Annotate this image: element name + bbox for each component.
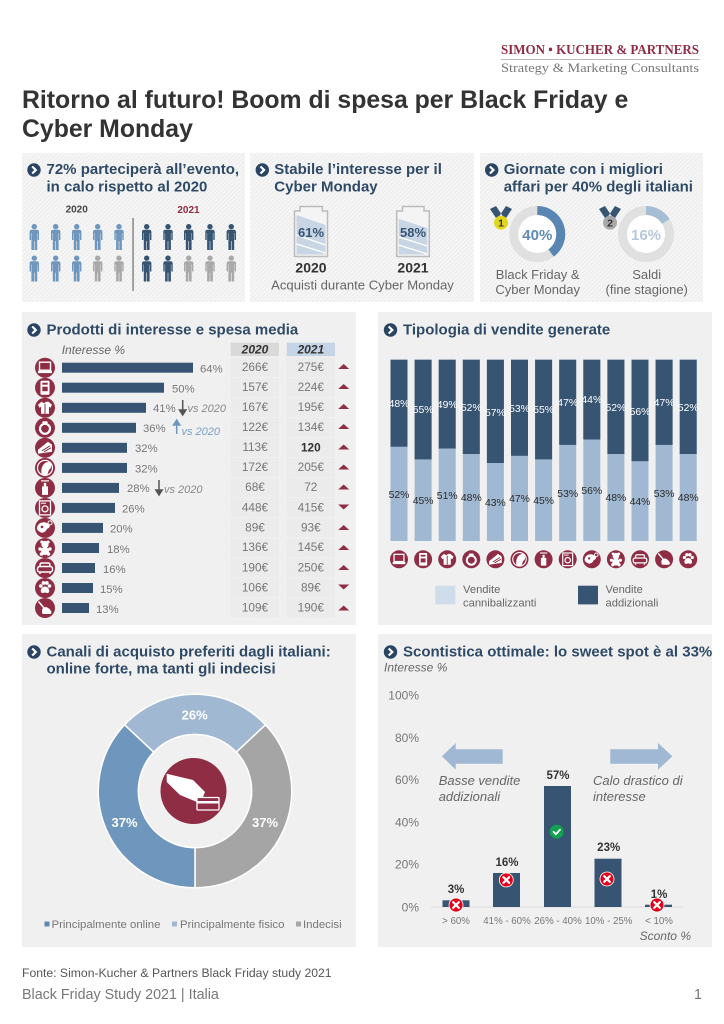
icon: medal 1 bbox=[490, 206, 512, 230]
label: 37% indecisi: 37% bbox=[252, 815, 278, 830]
legend: vendite cannibalizzanti: Vendite bbox=[463, 584, 500, 596]
stacked bar chart: 55% bbox=[533, 405, 554, 416]
annotation: 28% down vs 2020: vs 2020 bbox=[164, 484, 203, 496]
arrow: right bbox=[610, 743, 672, 770]
stacked bar chart: 43% bbox=[485, 498, 506, 509]
x axis labels: 10% - 25% bbox=[585, 916, 633, 927]
stacked bar chart: 44% bbox=[630, 497, 650, 508]
bar values bbox=[448, 770, 667, 901]
column header 2021: 2021 bbox=[296, 342, 324, 356]
bar values: 32% bbox=[135, 443, 158, 455]
bar values: 36% bbox=[143, 423, 166, 435]
donut: 16% bbox=[622, 210, 670, 258]
title: Ritorno al futuro! Boom di spesa per Black Friday e bbox=[22, 87, 628, 114]
stacked bar chart: 52% bbox=[678, 403, 699, 414]
spesa media 2021: 72 bbox=[304, 480, 317, 494]
legend: vendite cannibalizzanti bbox=[435, 584, 536, 610]
bar values: 13% bbox=[96, 604, 119, 616]
stacked bar chart: 57% bbox=[485, 408, 506, 419]
icon: battery 2021: 58% bbox=[400, 225, 426, 240]
bar chart: interesse bbox=[62, 363, 193, 613]
footer: Black Friday Study 2021 | Italia bbox=[22, 987, 219, 1003]
legend: vendite cannibalizzanti: cannibalizzanti bbox=[463, 598, 536, 610]
bar values: 50% bbox=[172, 384, 195, 396]
bar values: 16% bbox=[495, 857, 519, 869]
spesa media 2021: 205€ bbox=[298, 460, 324, 474]
heading: prodotti: Prodotti di interesse e spesa media bbox=[46, 322, 299, 338]
y axis labels: 20% bbox=[395, 858, 419, 872]
label: 2020: 2020 bbox=[66, 204, 88, 216]
icons: rejected ranges bbox=[449, 872, 664, 912]
label: 2021: 2021 bbox=[397, 260, 429, 276]
note: calo drastico bbox=[593, 773, 684, 804]
spesa media 2021: 224€ bbox=[298, 380, 324, 394]
donut: 40%: 40% bbox=[522, 227, 552, 244]
title: Cyber Monday bbox=[22, 116, 193, 143]
column header 2020: 2020 bbox=[241, 342, 269, 356]
icon: medal 1: 1 bbox=[498, 218, 504, 230]
spesa media 2021: 134€ bbox=[298, 420, 324, 434]
stacked bar chart: 48% bbox=[678, 493, 699, 504]
spesa media 2021: 89€ bbox=[301, 580, 321, 594]
donut: 40% bbox=[514, 210, 561, 258]
note: basse vendite bbox=[439, 773, 520, 804]
y axis labels: 60% bbox=[395, 773, 419, 787]
bar values: 20% bbox=[110, 524, 133, 536]
heading: 72% parteciperà: 72% parteciperà all’evento, bbox=[46, 161, 239, 178]
stacked bar chart: 53% bbox=[557, 489, 578, 500]
icon: medal 2: 2 bbox=[607, 218, 613, 230]
spesa media 2020: 190€ bbox=[242, 560, 269, 574]
donut: 16%: 16% bbox=[631, 227, 661, 244]
bar values: 64% bbox=[200, 364, 223, 376]
icon: battery 2020 bbox=[294, 206, 328, 256]
annotation: 36% up vs 2020 bbox=[174, 420, 221, 438]
bar values: 28% bbox=[127, 483, 150, 495]
logo: Simon-Kucher & Partners: Strategy & Marketing Consultants bbox=[501, 61, 699, 75]
heading: tipologia: Tipologia di vendite generate bbox=[403, 322, 610, 338]
stacked bar chart: 48% bbox=[461, 493, 482, 504]
people chart 2020 bbox=[30, 224, 124, 282]
annotation: 36% up vs 2020: vs 2020 bbox=[182, 426, 221, 438]
label: Interesse %: Interesse % bbox=[62, 343, 125, 357]
spesa media 2021: 93€ bbox=[301, 520, 321, 534]
heading: scontistica: Scontistica ottimale: lo sweet spot è al 33% bbox=[403, 644, 712, 660]
source note: Fonte: Simon-Kucher & Partners Black Friday study 2021 bbox=[22, 966, 332, 980]
donut chart bbox=[98, 694, 292, 888]
spesa media 2020: 136€ bbox=[242, 540, 269, 554]
heading: Giornate bbox=[504, 161, 693, 196]
bar values: 1% bbox=[651, 889, 667, 901]
bar values: 26% bbox=[122, 504, 145, 516]
bar values: 15% bbox=[100, 584, 123, 596]
y axis labels: 0% bbox=[402, 900, 419, 914]
stacked bar chart: 52% bbox=[461, 403, 482, 414]
label: 37% online: 37% bbox=[111, 815, 138, 830]
x axis labels: 41% - 60% bbox=[483, 916, 531, 927]
x axis labels: < 10% bbox=[645, 916, 673, 927]
panel: tipologia di vendite bbox=[378, 312, 712, 625]
icon: hand with card bbox=[160, 758, 226, 824]
bar values: 16% bbox=[103, 564, 126, 576]
spesa media 2020: 89€ bbox=[245, 520, 265, 534]
heading: canali: online forte, ma tanti gli indecisi bbox=[46, 660, 276, 678]
legend: channels: Principalmente online bbox=[52, 919, 160, 931]
stacked bar chart: 47% bbox=[509, 494, 530, 505]
stacked bar chart: 52% bbox=[606, 403, 626, 414]
heading: 72% parteciperà: in calo rispetto al 2020 bbox=[46, 178, 207, 196]
bar values: 41% bbox=[153, 403, 176, 415]
logo: Simon-Kucher & Partners bbox=[501, 42, 700, 75]
spesa media 2021 bbox=[298, 360, 324, 614]
spesa media 2020: 157€ bbox=[242, 380, 269, 394]
spesa media 2021: 250€ bbox=[298, 560, 324, 574]
annotation: 41% down vs 2020 bbox=[180, 400, 227, 415]
spesa media 2020 bbox=[242, 360, 269, 614]
panel: partecipazione all'evento bbox=[22, 153, 245, 302]
spesa media 2020: 172€ bbox=[242, 460, 269, 474]
spesa media 2020: 113€ bbox=[242, 440, 268, 454]
stacked bar chart: 52% bbox=[389, 490, 409, 501]
bar values: 57% bbox=[546, 770, 570, 782]
legend: vendite addizionali bbox=[578, 584, 658, 610]
legend: vendite addizionali: addizionali bbox=[606, 598, 658, 610]
label: 26%: 26% bbox=[182, 708, 208, 722]
note: basse vendite: Basse vendite bbox=[439, 773, 520, 788]
spesa media 2021: 145€ bbox=[298, 540, 324, 554]
logo: Simon-Kucher & Partners: SIMON • KUCHER & PARTNERS bbox=[501, 42, 699, 57]
heading: 72% parteciperà bbox=[46, 161, 239, 196]
x axis labels bbox=[442, 916, 673, 927]
legend: channels: Principalmente fisico bbox=[180, 919, 284, 931]
column header 2020 bbox=[231, 342, 279, 356]
stacked bar chart: 44% bbox=[581, 395, 602, 406]
x axis labels: 26% - 40% bbox=[534, 916, 582, 927]
label: Sconto %: Sconto % bbox=[640, 929, 691, 943]
stacked bar chart: 55% bbox=[413, 405, 433, 416]
caption: Black Friday & Cyber Monday: Cyber Monday bbox=[495, 282, 580, 297]
category icons bbox=[390, 550, 697, 568]
icon: medal 2 bbox=[599, 206, 621, 230]
spesa media 2021: 120 bbox=[301, 440, 321, 454]
note: calo drastico: Calo drastico di bbox=[593, 773, 684, 788]
stacked bar chart bbox=[389, 360, 699, 541]
panel: canali di acquisto bbox=[22, 634, 356, 947]
panel: scontistica ottimale bbox=[378, 634, 712, 947]
people chart 2021 bbox=[142, 224, 236, 282]
product icons bbox=[35, 358, 55, 618]
annotation: 28% down vs 2020 bbox=[156, 480, 203, 496]
heading: Stabile l'interesse: Cyber Monday bbox=[274, 178, 378, 196]
y axis labels: 40% bbox=[395, 816, 419, 830]
spesa media 2020: 106€ bbox=[242, 580, 269, 594]
stacked bar chart: 49% bbox=[437, 400, 458, 411]
bar values: 32% bbox=[135, 464, 158, 476]
icon: battery 2021 bbox=[397, 206, 429, 256]
stacked bar chart: 53% bbox=[509, 404, 530, 415]
title bbox=[22, 87, 628, 143]
stacked bar chart: 45% bbox=[533, 496, 554, 507]
heading: Stabile l'interesse: Stabile l’interesse per il bbox=[274, 161, 442, 178]
bar values: 3% bbox=[448, 884, 464, 896]
stacked bar chart: 56% bbox=[630, 407, 650, 418]
note: calo drastico: interesse bbox=[593, 789, 646, 804]
caption: Saldi: (fine stagione) bbox=[606, 282, 688, 297]
stacked bar chart: 48% bbox=[389, 399, 409, 410]
label: Interesse %: Interesse % bbox=[384, 660, 448, 674]
trend triangles bbox=[338, 364, 349, 610]
legend: channels bbox=[44, 919, 342, 931]
panel: Cyber Monday bbox=[250, 153, 474, 302]
column header 2021 bbox=[287, 342, 335, 356]
spesa media 2020: 167€ bbox=[242, 400, 269, 414]
caption: Black Friday & Cyber Monday bbox=[495, 267, 580, 297]
note: basse vendite: addizionali bbox=[439, 789, 501, 804]
spesa media 2020: 68€ bbox=[245, 480, 265, 494]
heading: canali: Canali di acquisto preferiti dagli italiani: bbox=[46, 644, 331, 660]
icon: battery 2020: 61% bbox=[298, 225, 324, 240]
stacked bar chart: 48% bbox=[606, 493, 626, 504]
spesa media 2021: 195€ bbox=[298, 400, 324, 414]
y axis labels bbox=[388, 688, 419, 914]
label: 2020: 2020 bbox=[295, 260, 327, 276]
label: 2021: 2021 bbox=[177, 205, 200, 216]
y axis labels: 80% bbox=[395, 731, 419, 745]
annotation: 41% down vs 2020: vs 2020 bbox=[188, 403, 227, 415]
spesa media 2021: 190€ bbox=[298, 600, 324, 614]
caption: Saldi bbox=[606, 267, 688, 297]
spesa media 2020: 448€ bbox=[242, 500, 269, 514]
stacked bar chart: 45% bbox=[413, 496, 433, 507]
stacked bar chart: 47% bbox=[654, 398, 674, 409]
stacked bar chart: 51% bbox=[437, 491, 458, 502]
caption: Saldi: Saldi bbox=[632, 267, 661, 282]
spesa media 2020: 122€ bbox=[242, 420, 269, 434]
legend: vendite addizionali: Vendite bbox=[606, 584, 643, 596]
panel: giornate migliori bbox=[480, 153, 703, 302]
heading: Giornate: affari per 40% degli italiani bbox=[504, 178, 693, 196]
caption: Acquisti durante Cyber Monday bbox=[271, 278, 454, 292]
table cells bbox=[231, 358, 335, 618]
page number: 1 bbox=[694, 987, 702, 1003]
heading: Giornate: Giornate con i migliori bbox=[504, 161, 663, 178]
arrow: left bbox=[442, 743, 503, 770]
stacked bar chart: 53% bbox=[654, 489, 674, 500]
spesa media 2020: 266€ bbox=[242, 360, 269, 374]
spesa media 2021: 415€ bbox=[298, 500, 324, 514]
bar values bbox=[96, 364, 223, 616]
heading: Stabile l'interesse bbox=[274, 161, 442, 196]
spesa media 2020: 109€ bbox=[242, 600, 269, 614]
icon: sweet spot check bbox=[550, 825, 564, 839]
y axis labels: 100% bbox=[388, 688, 419, 702]
bar values: 18% bbox=[107, 544, 130, 556]
bar chart: discount bbox=[442, 786, 672, 907]
bar values: 23% bbox=[597, 842, 620, 854]
caption: Black Friday & Cyber Monday: Black Friday & bbox=[496, 267, 580, 282]
legend: channels: Indecisi bbox=[303, 919, 342, 931]
panel: prodotti di interesse bbox=[22, 312, 356, 625]
x axis labels: > 60% bbox=[442, 916, 470, 927]
heading: canali bbox=[46, 644, 331, 678]
stacked bar chart: 56% bbox=[581, 486, 602, 497]
stacked bar chart: 47% bbox=[557, 398, 578, 409]
spesa media 2021: 275€ bbox=[298, 360, 324, 374]
